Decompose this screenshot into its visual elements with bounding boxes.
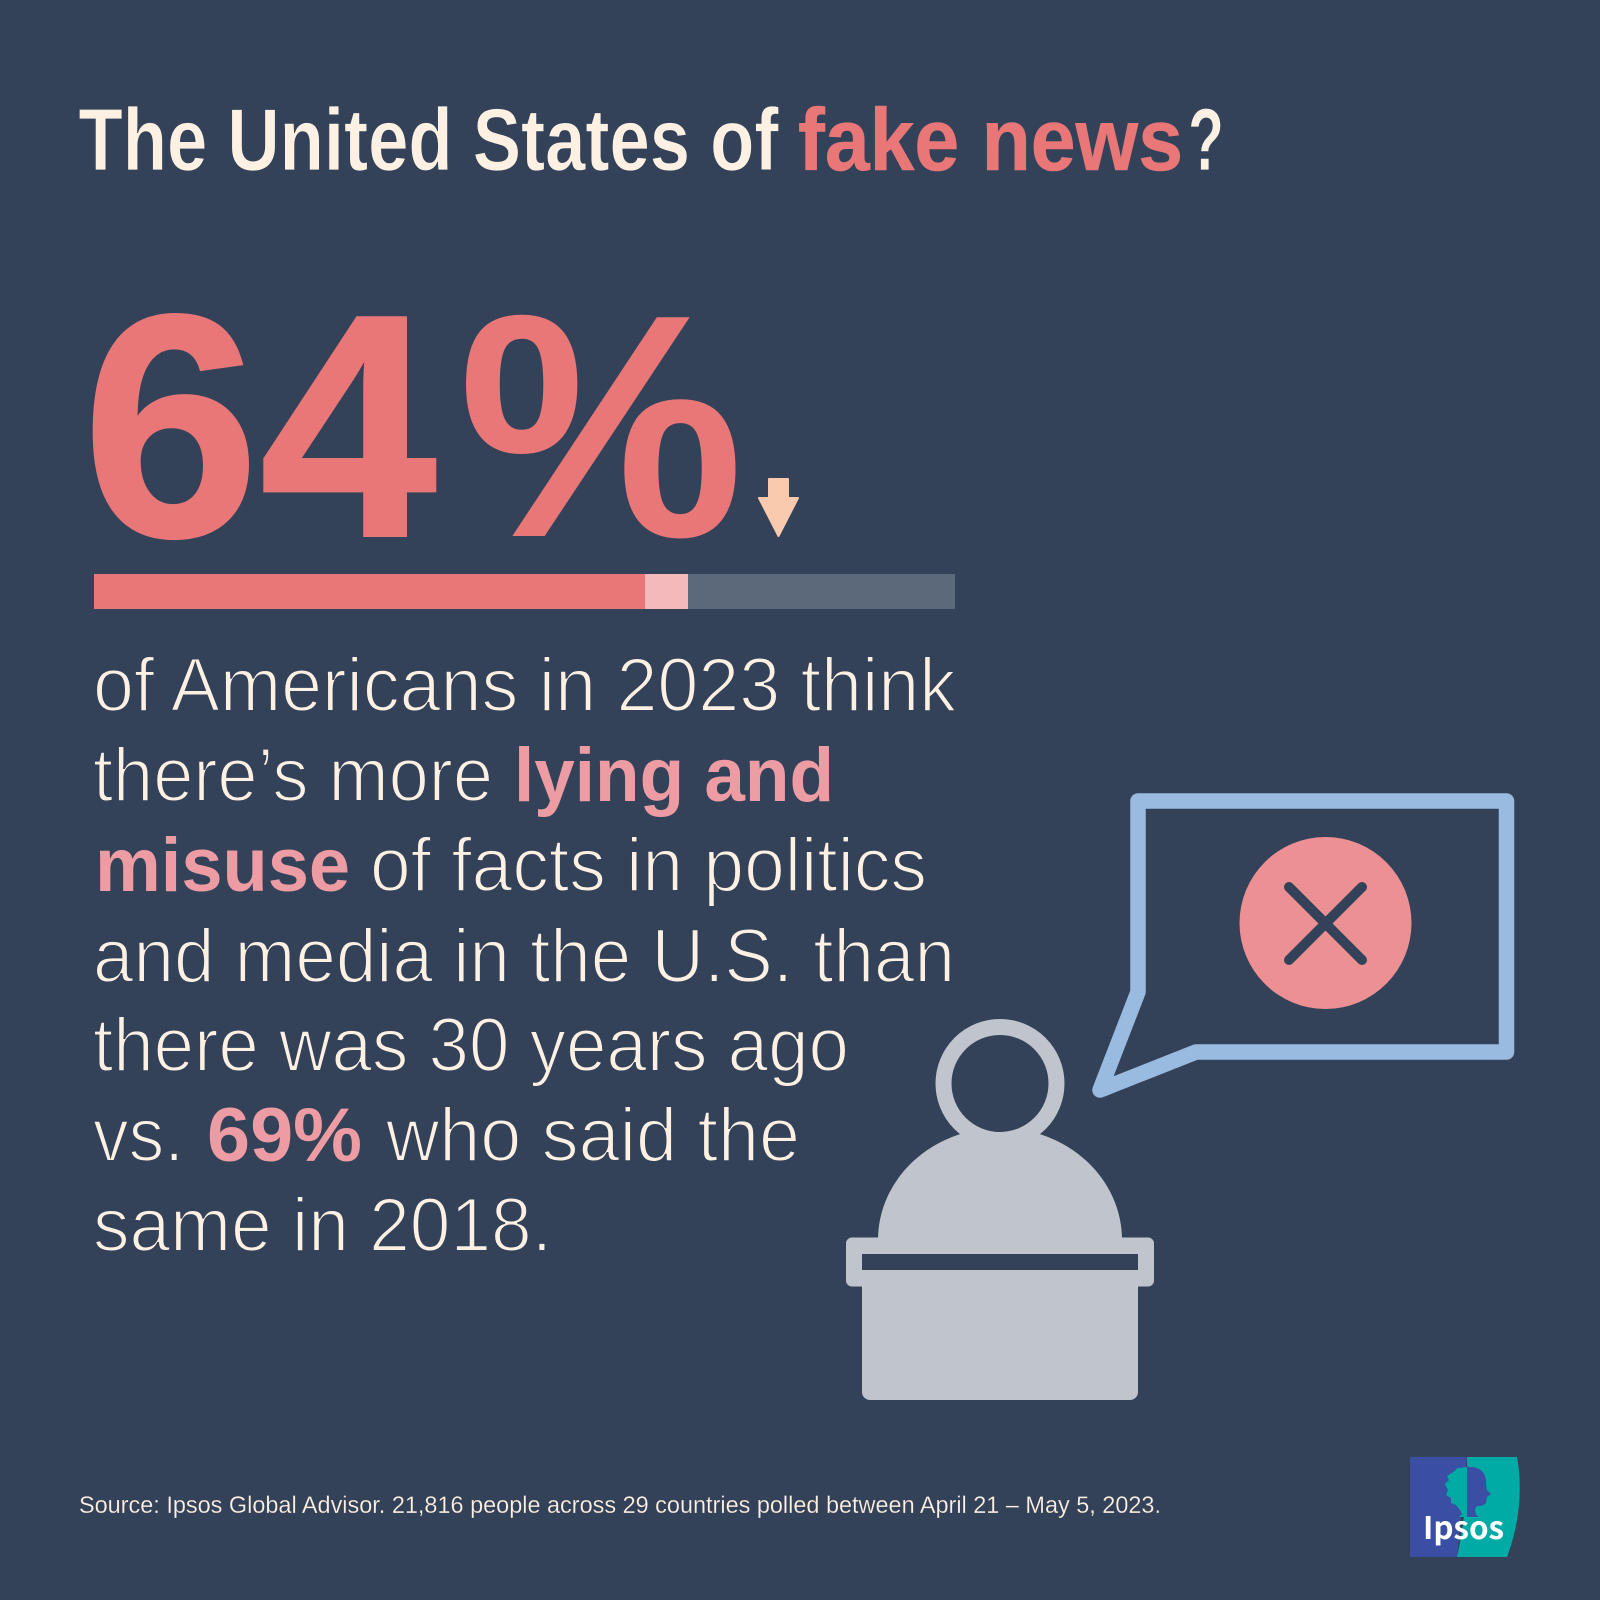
body text: lying and	[514, 733, 834, 818]
body text	[93, 643, 957, 1268]
body text: same in 2018.	[93, 1183, 552, 1268]
big number: 64%: %	[458, 249, 744, 604]
title: fake news	[798, 90, 1183, 189]
body text: misuse	[95, 823, 350, 908]
icon: down arrow	[759, 479, 798, 536]
body text: vs.	[93, 1093, 184, 1178]
icon: speech bubble with cross	[1100, 801, 1506, 1090]
body text: and media in the U.S. than	[93, 914, 955, 999]
big number: 64%	[82, 249, 744, 604]
body text: of facts in politics	[370, 823, 927, 908]
logo silhouette: left hair	[1445, 1467, 1467, 1517]
body text: there was 30 years ago	[93, 1003, 849, 1088]
source note: Source: Ipsos Global Advisor. 21,816 people across 29 countries polled between April 21 – May 5, 2023.	[79, 1492, 1161, 1519]
body text: who said the	[385, 1093, 800, 1178]
logo: Ipsos	[1410, 1457, 1520, 1557]
body text: 69%	[207, 1093, 362, 1178]
icon: cross in circle	[1240, 837, 1412, 1009]
title: The United States of	[78, 90, 779, 189]
big number: 64%: 64	[82, 249, 439, 604]
logo silhouette: right face	[1467, 1467, 1491, 1517]
logo: Ipsos: Ipsos	[1423, 1503, 1504, 1548]
body text: there’s more	[93, 733, 493, 818]
body text: of Americans in 2023 think	[93, 643, 957, 728]
title: ?	[1188, 90, 1224, 189]
progress bar	[94, 574, 955, 609]
icon: speaker at podium	[846, 1027, 1154, 1400]
